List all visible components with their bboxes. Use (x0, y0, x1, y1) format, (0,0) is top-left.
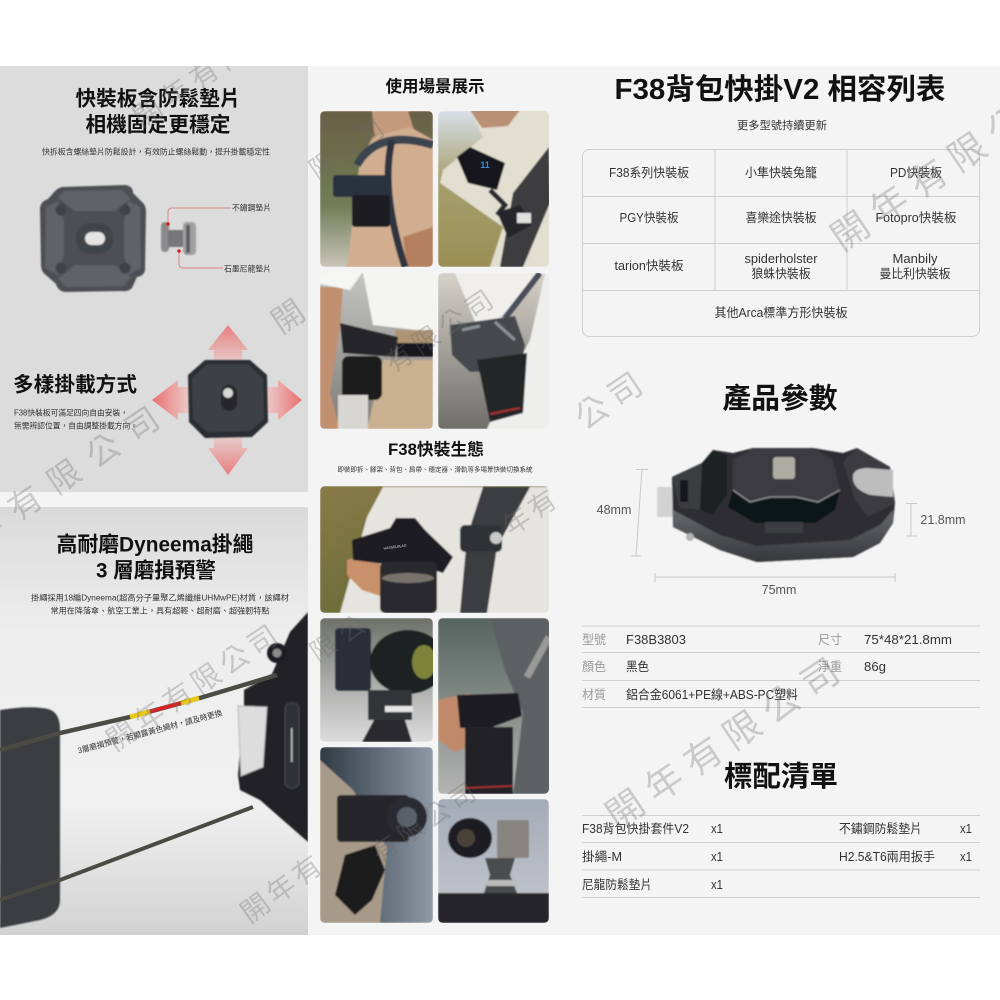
illustration: dark block (0, 707, 60, 928)
text: mounting description: F38快裝板可滿足四向自由安裝， (14, 408, 128, 418)
table: package contents: x1 (711, 822, 723, 836)
table: compatible plates: 狼蛛快裝板 (752, 266, 811, 281)
heading: pad title (76, 88, 240, 136)
photo: chest mounted camera (438, 273, 550, 429)
watermark: company name: 開年有限公司 (97, 611, 289, 759)
table: package contents: H2.5&T6兩用扳手 (839, 850, 935, 864)
text: mounting description: 無需辨認位置，自由調整掛載方向。 (14, 420, 138, 430)
text: mounting description (14, 408, 138, 430)
table: compatible plates: Manbily (892, 252, 938, 266)
table: compatible plates: 曼比利快裝板 (880, 266, 951, 281)
arrow: left (152, 380, 192, 420)
product: F38 clip photo (657, 448, 895, 562)
photo: action camera on jacket (438, 110, 550, 267)
text: rope description (31, 592, 289, 616)
table: product specification: 材質 (582, 687, 606, 702)
table: compatible plates: 小隼快裝兔籠 (745, 165, 817, 180)
photo: camera on slider (438, 799, 549, 923)
dimension: height 48mm: 48mm (597, 503, 631, 517)
arrow: down (208, 435, 248, 475)
table: package contents: x1 (960, 822, 972, 836)
photo: camera on tripod (320, 618, 433, 742)
heading: rope title: 高耐磨Dyneema掛繩 (56, 532, 254, 556)
callout: graphite nylon pad: 石墨尼龍墊片 (224, 264, 271, 274)
watermark: company name: 年有 (493, 476, 567, 544)
table: package contents: x1 (960, 850, 972, 864)
icon: quick release plate top (188, 360, 268, 438)
illustration: rope and camera (0, 612, 308, 928)
heading: package list: 標配清單 (724, 761, 838, 793)
heading: usage scenes: 使用場景展示 (386, 77, 484, 96)
heading: F38 ecosystem: F38快裝生態 (388, 440, 484, 459)
watermark: company name: 限公 (301, 601, 379, 669)
watermark: company name: 開年有 (231, 843, 333, 931)
watermark: company name: 有限公司 (363, 770, 487, 870)
table: compatible plates: 喜樂途快裝板 (746, 210, 817, 225)
text: pad description: 快拆板含螺絲墊片防鬆設計，有效防止螺絲鬆動，提升掛載穩定性 (42, 146, 270, 156)
table: compatible plates: Fotopro快裝板 (876, 210, 957, 225)
table: package contents: x1 (711, 850, 723, 864)
dimension: height 48mm (597, 469, 648, 556)
table: product specification: 型號 (582, 632, 606, 647)
table: package contents (582, 816, 980, 898)
table: product specification: 75*48*21.8mm (864, 633, 952, 647)
dimension: width 75mm (655, 573, 895, 597)
heading: compatibility title: F38背包快掛V2 相容列表 (614, 73, 946, 106)
arrow: up (208, 325, 248, 365)
illustration: lower rope (0, 807, 253, 900)
dimension: depth 21.8mm: 21.8mm (920, 513, 966, 527)
photo: backpack shoulder camera (320, 111, 433, 267)
photo: camera on gimbal (320, 747, 433, 923)
table: product specification: 鋁合金6061+PE線+ABS-PC塑料 (626, 687, 798, 702)
photo: belt mounted camera (320, 273, 433, 429)
table: package contents: 尼龍防鬆墊片 (582, 877, 652, 892)
text: wear warning: 3層磨損預警，若顯露黃色繩材，請及時更換 (77, 708, 223, 755)
table: compatible plates: PGY快裝板 (620, 210, 679, 225)
table: package contents: 掛繩-M (582, 849, 622, 864)
table: package contents: F38背包快掛套件V2 (582, 821, 689, 836)
illustration: wear indicator (130, 698, 199, 717)
table: package contents: 不鏽鋼防鬆墊片 (839, 821, 922, 836)
callout: graphite nylon pad (177, 249, 271, 274)
heading: mounting options: 多樣掛載方式 (13, 372, 138, 396)
heading: pad title: 快裝板含防鬆墊片 (76, 88, 240, 110)
icon: quick release plate underside (40, 185, 146, 292)
table: compatible plates (582, 149, 980, 336)
text: compatibility subtitle: 更多型號持續更新 (737, 118, 827, 132)
illustration: camera body (238, 612, 308, 842)
text: rope description: 掛繩採用18編Dyneema(超高分子量聚乙烯纖維UHMwPE)材質，該繩材 (31, 592, 289, 602)
table: compatible plates: 其他Arca標準方形快裝板 (714, 305, 848, 320)
watermark: company name: 限公司 (301, 107, 393, 187)
callout: stainless pad (166, 202, 271, 226)
label: camera brand: HASSELBLAD (383, 543, 407, 551)
illustration: upper rope (0, 675, 277, 750)
watermark: company name: 開年有限公司 (593, 637, 857, 839)
watermark: company name: 有限公司 (376, 276, 504, 380)
heading: product parameters: 產品參數 (722, 383, 838, 415)
icon: screw with pads (161, 222, 196, 255)
watermark: company name: 開 (261, 287, 313, 343)
heading: rope title (56, 532, 254, 582)
table: product specification: 黑色 (626, 659, 649, 674)
table: compatible plates: PD快裝板 (890, 165, 942, 180)
heading: rope title: 3 層磨損預警 (96, 560, 216, 582)
table: compatible plates: spiderholster (744, 252, 818, 266)
table: product specification: 淨重 (818, 659, 842, 674)
table: package contents: x1 (711, 878, 723, 892)
arrow: right (264, 380, 302, 420)
table: product specification: 顏色 (582, 659, 606, 674)
photo: medium format camera with hand (320, 486, 550, 613)
text: rope description: 常用在降落傘、航空工業上，具有超輕、超耐磨、超強韌特點 (50, 606, 270, 616)
label: camera model mark: 11 (480, 160, 490, 170)
dimension: width 75mm: 75mm (762, 583, 796, 597)
table: product specification: 86g (864, 660, 886, 674)
panel: Dyneema rope (0, 507, 308, 935)
table: product specification: 尺寸 (818, 633, 842, 647)
table: compatible plates: tarion快裝板 (614, 258, 684, 273)
watermark: company name: 公司 (563, 355, 657, 439)
table: product specification: F38B3803 (626, 633, 686, 647)
text: ecosystem description: 即裝即拆、腳架、背包、肩帶、穩定器、滑軌等多場景快裝切換系統 (338, 464, 533, 474)
dimension: depth 21.8mm (906, 504, 966, 536)
table: compatible plates: F38系列快裝板 (609, 165, 689, 180)
photo: camera held at chest (438, 618, 550, 794)
heading: pad title: 相機固定更穩定 (86, 112, 230, 136)
callout: stainless pad: 不鏽鋼墊片 (232, 202, 271, 212)
table: product specification (582, 626, 980, 708)
panel: anti-loosening pad (0, 66, 308, 492)
